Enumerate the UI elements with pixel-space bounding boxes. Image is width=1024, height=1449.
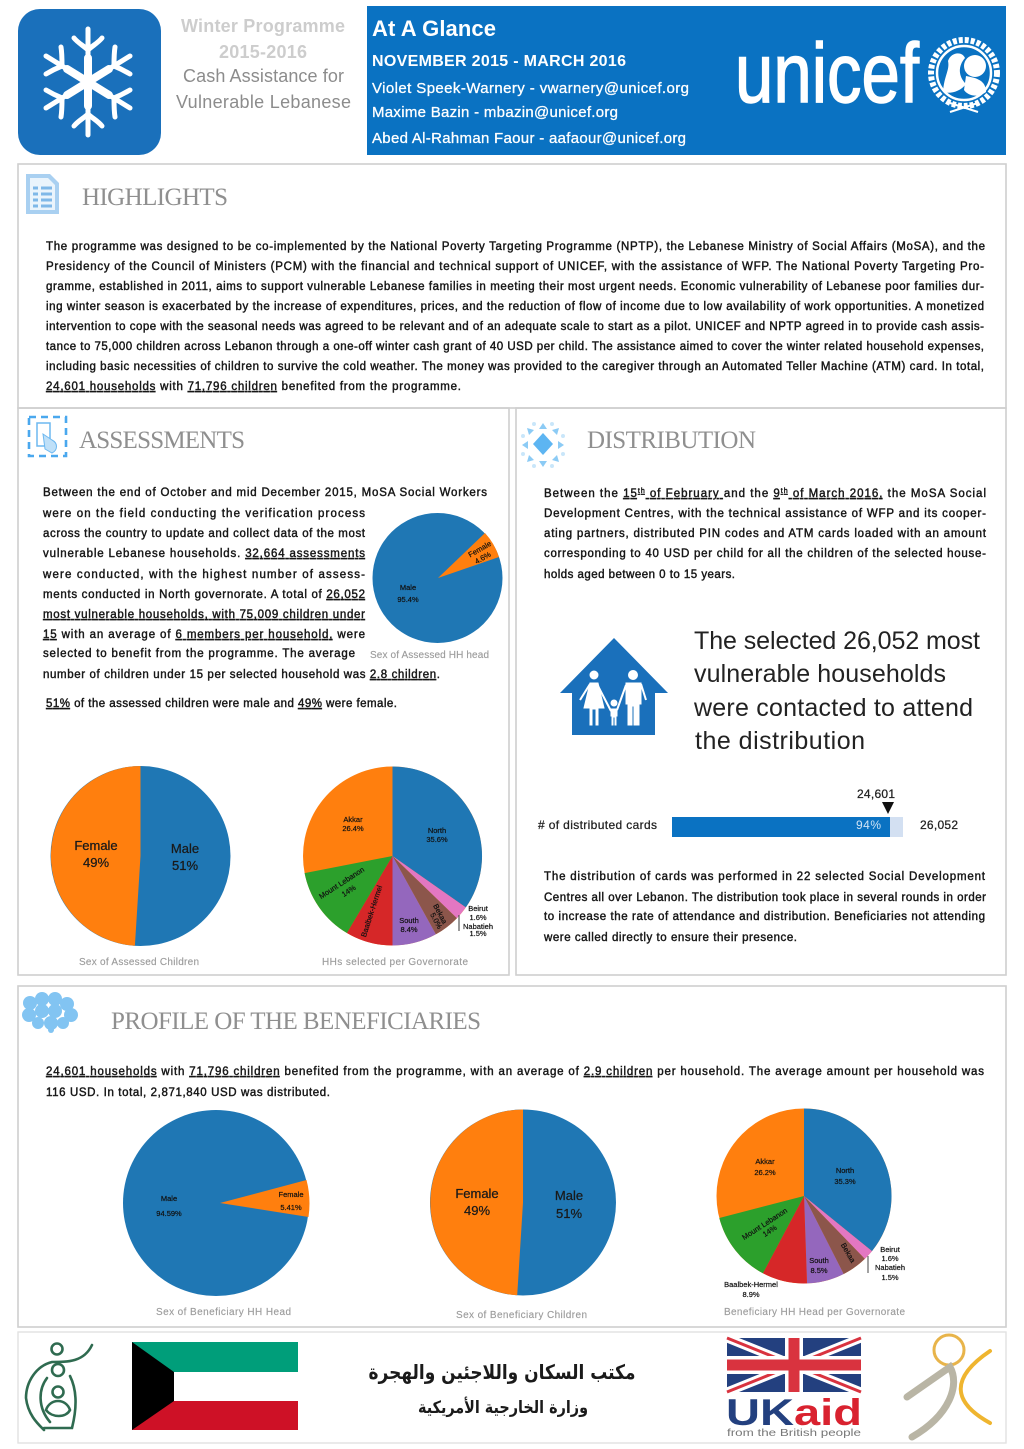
distribution detail text: to increase the rate of attendance and distribution. Beneficiaries not attending xyxy=(544,911,985,923)
distribution text: of February xyxy=(646,488,723,500)
bullet bar: distributed cards xyxy=(538,787,958,837)
distribution text: holds aged between 0 to 15 years. xyxy=(544,569,735,581)
pie chart: households selected per governorate: Bekaa xyxy=(431,902,450,926)
icon: document xyxy=(26,174,59,214)
pie chart: beneficiary HH head per governorate: Baalbek-Hermel xyxy=(724,1280,778,1289)
distribution text: ating partners, distributed PIN codes and ATM cards loaded with an amount xyxy=(544,528,987,540)
panel: distribution xyxy=(516,408,1006,975)
highlights text: Presidency of the Council of Ministers (PCM) with the financial and technical support of UNICEF, with the assistance of WFP. The National Poverty Targeting Pro- xyxy=(46,261,984,273)
highlights text: 24,601 households with 71,796 children benefited from the programme. xyxy=(46,381,461,393)
caption: households selected per governorate: HHs selected per Governorate xyxy=(322,957,468,968)
pie chart: households selected per governorate: 1.5% xyxy=(469,929,487,938)
pie chart: sex of beneficiary HH head: Male xyxy=(161,1194,177,1203)
distribution detail text: were called directly to ensure their presence. xyxy=(543,932,797,944)
highlights text: including basic necessities of children to survive the cold weather. The money was provided to the caregiver through an Automated Teller Machine (ATM) card. In total, xyxy=(46,361,984,373)
pie chart: beneficiary HH head per governorate: 26.2% xyxy=(754,1168,776,1177)
logo: flag of Kuwait xyxy=(132,1342,298,1430)
assessments text xyxy=(42,487,487,710)
distribution text: th xyxy=(638,488,645,495)
profile text: 24,601 households with 71,796 children benefited from the programme, with an average of 2.9 children per household. The average amount per household was xyxy=(46,1066,984,1078)
logo: family emblem xyxy=(26,1344,92,1430)
bullet bar: distributed cards: 94% xyxy=(856,818,881,832)
bar total: 26,052 xyxy=(920,818,958,832)
pie chart: sex of assessed HH head: Male xyxy=(400,583,416,592)
pie chart: beneficiary HH head per governorate: Mount Lebanon xyxy=(740,1206,789,1242)
highlights text: The programme was designed to be co-implemented by the National Poverty Targeting Programme (NPTP), the Lebanese Ministry of Social Affairs (MoSA), and the xyxy=(46,241,985,253)
pie chart: sex of assessed HH head: 95.4% xyxy=(397,595,419,604)
pie chart: sex of beneficiary HH head: 94.59% xyxy=(156,1209,182,1218)
pie chart: sex of assessed HH head: 4.6% xyxy=(473,550,493,566)
assessments text: 51% of the assessed children were male and 49% were female. xyxy=(46,698,397,710)
highlights text xyxy=(46,241,985,393)
assessments text: number of children under 15 per selected household was 2.8 children. xyxy=(43,669,440,681)
banner contacts: Abed Al-Rahman Faour - aafaour@unicef.org xyxy=(372,130,686,147)
distribution text: and the 9 xyxy=(724,488,780,500)
pie chart: beneficiary HH head per governorate: 8.9% xyxy=(742,1290,760,1299)
logo: UK aid: from the British people xyxy=(727,1428,862,1439)
distribution text: the MoSA Social xyxy=(888,488,986,500)
pie chart: sex of beneficiary children: Female xyxy=(455,1186,499,1201)
pie chart: households selected per governorate: South xyxy=(399,916,419,925)
banner contacts: Violet Speek-Warnery - vwarnery@unicef.org xyxy=(372,80,689,97)
icon: people cluster xyxy=(22,992,78,1033)
icon: family in house xyxy=(560,638,668,735)
caption: sex of beneficiary HH head: Sex of Beneficiary HH Head xyxy=(156,1307,291,1318)
pie chart: households selected per governorate: 8.4% xyxy=(400,925,418,934)
unicef wordmark: unicef xyxy=(735,26,920,120)
banner heading: At A Glance xyxy=(372,16,496,41)
pie chart: beneficiary HH head per governorate: North xyxy=(836,1166,854,1175)
pie chart: households selected per governorate: 5.0% xyxy=(428,911,444,931)
distribution callout xyxy=(693,627,980,755)
pie chart: sex of assessed HH head xyxy=(372,513,502,643)
icon: unicef emblem xyxy=(931,40,997,112)
logo: UK aid: UK aid xyxy=(726,1392,862,1433)
distribution callout: were contacted to attend xyxy=(693,694,973,722)
panel: profile of the beneficiaries xyxy=(18,986,1006,1327)
logo: Arabic office names: وزارة الخارجية الأمريكية xyxy=(418,1397,588,1418)
programme title: Winter Programme xyxy=(181,16,345,36)
logo: stylised figure xyxy=(907,1335,990,1437)
programme title: 2015-2016 xyxy=(219,42,307,62)
highlights text: gramme, established in 2011, aims to support vulnerable Lebanese families in meeting their most urgent needs. Economic vulnerability of Lebanese poor families dur- xyxy=(46,281,984,293)
pie chart: sex of assessed children: Female xyxy=(74,838,118,853)
pie chart: sex of beneficiary HH head: Female xyxy=(278,1190,304,1199)
assessments text: were conducted, with the highest number of assess- xyxy=(42,569,365,581)
target marker: 24,601 xyxy=(857,787,895,801)
pie chart: sex of beneficiary children: Male xyxy=(555,1188,583,1203)
distribution text: Between the 15 xyxy=(544,488,637,500)
profile text: 116 USD. In total, 2,871,840 USD was distributed. xyxy=(46,1087,330,1099)
distribution detail text: The distribution of cards was performed in 22 selected Social Development xyxy=(544,871,986,883)
bar label: # of distributed cards xyxy=(538,818,657,832)
panel: donor logos xyxy=(18,1332,1006,1443)
caption: sex of assessed children: Sex of Assessed Children xyxy=(79,957,199,968)
pie chart: sex of assessed children: 49% xyxy=(83,855,109,870)
pie chart: beneficiary HH head per governorate: 14% xyxy=(761,1223,779,1239)
distribution text: of March 2016, xyxy=(789,488,882,500)
distribution callout: The selected 26,052 most xyxy=(694,627,980,655)
pie chart: households selected per governorate: 14% xyxy=(340,883,358,899)
assessments text: were on the field conducting the verification process xyxy=(42,508,365,520)
distribution text: Development Centres, with the technical assistance of WFP and its cooper- xyxy=(544,508,986,520)
caption: sex of beneficiary children: Sex of Beneficiary Children xyxy=(456,1310,587,1321)
programme title: Vulnerable Lebanese xyxy=(176,92,351,112)
pie chart: sex of beneficiary children: 51% xyxy=(556,1206,582,1221)
assessments text: Between the end of October and mid December 2015, MoSA Social Workers xyxy=(43,487,487,499)
assessments text: vulnerable Lebanese households. 32,664 assessments xyxy=(43,548,365,560)
pie chart: beneficiary HH head per governorate: 35.3% xyxy=(834,1177,856,1186)
banner contacts xyxy=(372,80,689,147)
distribution callout: vulnerable households xyxy=(694,660,946,688)
distribution detail text xyxy=(543,871,986,944)
logo: UK aid xyxy=(726,1338,862,1439)
highlights text: ing winter season is exacerbated by the increase of expenditures, prices, and the reduction of flow of income due to low availability of work opportunities. A monetized xyxy=(46,301,984,313)
panel: at a glance banner xyxy=(367,6,1006,155)
pie chart: beneficiary HH head per governorate: Nabatieh xyxy=(875,1263,905,1272)
distribution text: corresponding to 40 USD per child for all the children of the selected house- xyxy=(544,548,986,560)
assessments text: across the country to update and collect data of the most xyxy=(43,528,366,540)
pie chart: households selected per governorate: Mount Lebanon xyxy=(317,865,366,901)
logo: Arabic office names xyxy=(368,1360,636,1418)
profile text xyxy=(46,1066,984,1099)
pie chart: sex of assessed children: Male xyxy=(171,841,199,856)
assessments text: 15 with an average of 6 members per household, were xyxy=(43,629,365,641)
distribution detail text: Centres all over Lebanon. The distribution took place in several rounds in order xyxy=(544,892,986,904)
profile heading: PROFILE OF THE BENEFICIARIES xyxy=(111,1008,481,1035)
panel: highlights xyxy=(18,164,1006,408)
icon: touch screen xyxy=(29,417,66,456)
pie chart: beneficiary HH head per governorate: South xyxy=(809,1256,829,1265)
caption: sex of assessed HH head: Sex of Assessed HH head xyxy=(370,650,489,661)
pie chart: sex of assessed children: 51% xyxy=(172,858,198,873)
pie chart: beneficiary HH head per governorate: 8.5% xyxy=(810,1266,828,1275)
assessments heading: ASSESSMENTS xyxy=(79,427,245,454)
panel: assessments xyxy=(18,408,509,975)
pie chart: beneficiary HH head per governorate: Bekaa xyxy=(839,1241,858,1265)
pie chart: households selected per governorate: 26.4% xyxy=(342,824,364,833)
programme title xyxy=(176,16,351,112)
pie chart: households selected per governorate: Beirut xyxy=(468,904,489,913)
assessments text: most vulnerable households, with 75,009 children under xyxy=(43,609,365,621)
banner dates: NOVEMBER 2015 - MARCH 2016 xyxy=(372,53,626,70)
pie chart: beneficiary HH head per governorate: Akkar xyxy=(755,1157,775,1166)
pie chart: households selected per governorate: 1.6% xyxy=(469,913,487,922)
pie chart: households selected per governorate: Nabatieh xyxy=(463,922,493,931)
highlights text: tance to 75,000 children across Lebanon through a one-off winter cash grant of 40 USD per child. The assistance aimed to cover the winter related household expenses, xyxy=(46,341,984,353)
pie chart: households selected per governorate: 35.6% xyxy=(426,835,448,844)
distribution text xyxy=(544,488,987,581)
highlights heading: HIGHLIGHTS xyxy=(82,184,228,211)
icon: snowflake tile xyxy=(18,9,161,155)
pie chart: sex of beneficiary children: 49% xyxy=(464,1203,490,1218)
pie chart: beneficiary HH head per governorate: 1.5% xyxy=(881,1273,899,1282)
pie chart: beneficiary HH head per governorate xyxy=(716,1108,905,1299)
assessments text: selected to benefit from the programme. The average xyxy=(43,648,355,660)
pie chart: sex of assessed children xyxy=(50,766,230,946)
pie chart: households selected per governorate xyxy=(303,766,493,946)
logo: Arabic office names: مكتب السكان واللاجئين والهجرة xyxy=(368,1360,636,1384)
pie chart: sex of assessed HH head: Female xyxy=(467,539,493,559)
pie chart: beneficiary HH head per governorate: Beirut xyxy=(880,1245,901,1254)
banner contacts: Maxime Bazin - mbazin@unicef.org xyxy=(372,104,618,121)
pie chart: households selected per governorate: Baalbek-Hermel xyxy=(359,884,384,938)
highlights text: intervention to cope with the seasonal needs was agreed to be relevant and of an adequate scale to start as a pilot. UNICEF and NPTP agreed in to provide cash assis- xyxy=(46,321,984,333)
distribution text: th xyxy=(781,488,788,495)
assessments text: ments conducted in North governorate. A total of 26,052 xyxy=(43,589,365,601)
icon: distribution arrows xyxy=(521,422,565,468)
pie chart: beneficiary HH head per governorate: 1.6% xyxy=(881,1254,899,1263)
pie chart: households selected per governorate: Akkar xyxy=(343,815,363,824)
distribution callout: the distribution xyxy=(695,727,865,755)
programme title: Cash Assistance for xyxy=(183,66,344,86)
pie chart: households selected per governorate: North xyxy=(428,826,446,835)
caption: beneficiary HH head per governorate: Beneficiary HH Head per Governorate xyxy=(724,1307,905,1318)
pie chart: sex of beneficiary HH head: 5.41% xyxy=(280,1203,302,1212)
pie chart: sex of beneficiary children xyxy=(430,1110,616,1296)
distribution heading: DISTRIBUTION xyxy=(587,427,756,454)
pie chart: sex of beneficiary HH head xyxy=(123,1110,309,1296)
